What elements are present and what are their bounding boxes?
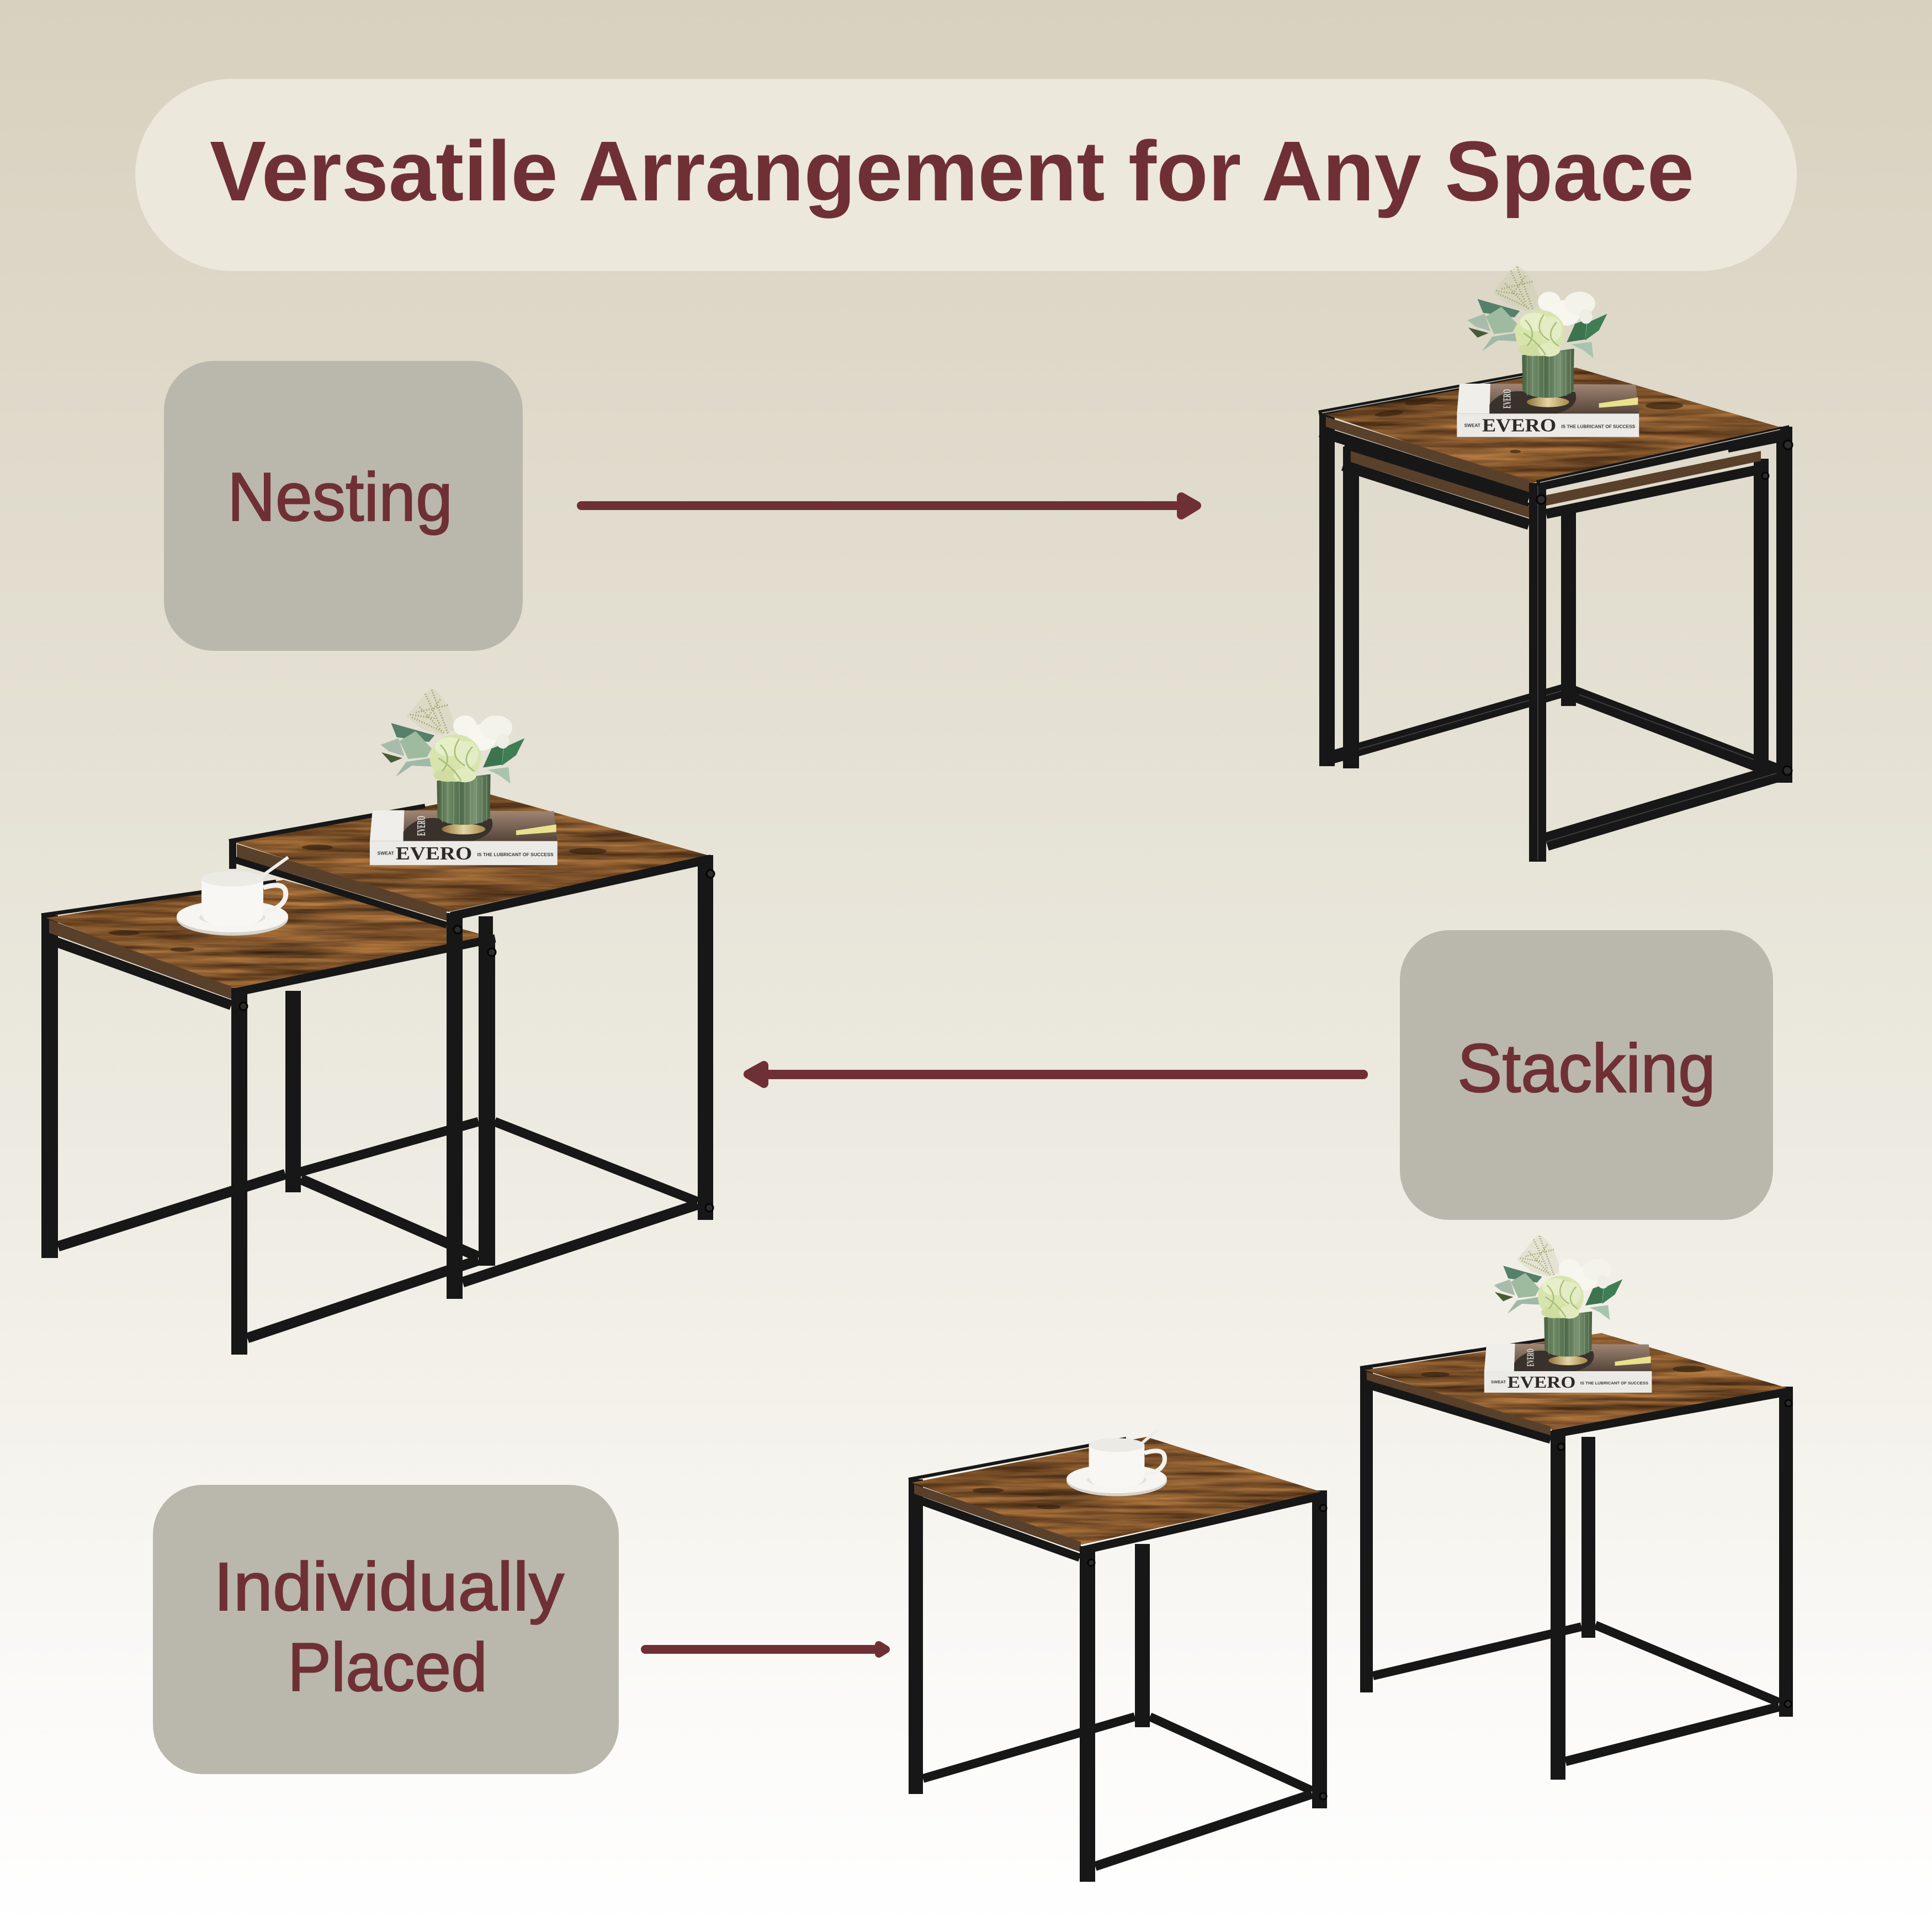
label text: Stacking: Stacking bbox=[1457, 1031, 1716, 1107]
front leg bbox=[1551, 1431, 1565, 1780]
bolts bbox=[1537, 440, 1792, 775]
illustration: large individual table bbox=[1360, 1333, 1793, 1780]
book: SWEAT bbox=[1464, 423, 1480, 428]
label text: Individually Placed: Individually bbox=[214, 1549, 564, 1625]
illustration: nested tables bbox=[1319, 368, 1792, 862]
bouquet bbox=[1494, 1234, 1622, 1320]
label text: Individually Placed bbox=[214, 1549, 564, 1706]
front leg bbox=[1080, 1546, 1095, 1882]
bolts bbox=[1558, 1400, 1792, 1707]
small table front leg bbox=[231, 988, 247, 1355]
decor: book and bouquet on stacked table bbox=[359, 682, 558, 865]
wood top bbox=[909, 1437, 1326, 1558]
book: EVERO bbox=[1482, 416, 1556, 436]
decor: book and bouquet on large individual table bbox=[1474, 1229, 1652, 1393]
book bbox=[1457, 384, 1639, 437]
book: EVERO bbox=[1501, 389, 1514, 408]
arrow: individually placed to separate tables bbox=[641, 1645, 886, 1654]
book: EVERO bbox=[396, 843, 472, 864]
bolts bbox=[240, 870, 714, 1212]
book: SWEAT bbox=[378, 851, 394, 856]
book: EVERO bbox=[1525, 1349, 1536, 1366]
legs and base bbox=[1360, 1368, 1793, 1761]
book: IS THE LUBRICANT OF SUCCESS bbox=[1580, 1381, 1648, 1386]
nested table legs and base bbox=[1319, 413, 1792, 842]
book bbox=[370, 810, 558, 865]
panel: stacking label bbox=[1400, 930, 1773, 1220]
bouquet bbox=[1467, 265, 1607, 358]
arrow: nesting to nested tables bbox=[577, 497, 1197, 515]
decor: book and bouquet on nested table bbox=[1446, 259, 1639, 437]
small table legs and base bbox=[41, 915, 495, 1338]
icon: cup and saucer on individual table bbox=[1066, 1429, 1167, 1496]
vase bbox=[1522, 349, 1574, 407]
bolts bbox=[1088, 1505, 1326, 1800]
panel: nesting label bbox=[164, 361, 523, 651]
label text: Individually Placed: Placed bbox=[288, 1630, 487, 1706]
icon: cup and saucer on stacked table bbox=[177, 857, 288, 936]
arrow: stacking to stacked tables bbox=[748, 1065, 1368, 1084]
large table front leg bbox=[447, 913, 463, 1299]
vase bbox=[1544, 1312, 1592, 1365]
large table top bbox=[229, 794, 711, 925]
book: IS THE LUBRICANT OF SUCCESS bbox=[477, 852, 554, 857]
front leg bbox=[1529, 483, 1546, 862]
panel: individually placed label bbox=[153, 1485, 619, 1774]
label text: Nesting: Nesting bbox=[227, 459, 453, 535]
large table legs and base bbox=[463, 855, 713, 1282]
wood top bbox=[1360, 1333, 1792, 1440]
vase bbox=[437, 774, 491, 835]
illustration: stacked tables bbox=[41, 794, 714, 1355]
title banner bbox=[135, 79, 1797, 271]
book: EVERO bbox=[416, 816, 428, 836]
book: IS THE LUBRICANT OF SUCCESS bbox=[1561, 424, 1636, 429]
book bbox=[1484, 1344, 1652, 1393]
book: SWEAT bbox=[1491, 1379, 1506, 1384]
book: EVERO bbox=[1508, 1373, 1575, 1392]
title text: Versatile Arrangement for Any Space bbox=[210, 124, 1694, 219]
wood table top bbox=[1319, 368, 1790, 498]
small table top bbox=[41, 880, 495, 1005]
legs and base bbox=[909, 1479, 1327, 1866]
nested lower table top edge bbox=[1343, 436, 1788, 524]
bouquet bbox=[380, 688, 524, 784]
illustration: small individual table bbox=[909, 1437, 1327, 1882]
